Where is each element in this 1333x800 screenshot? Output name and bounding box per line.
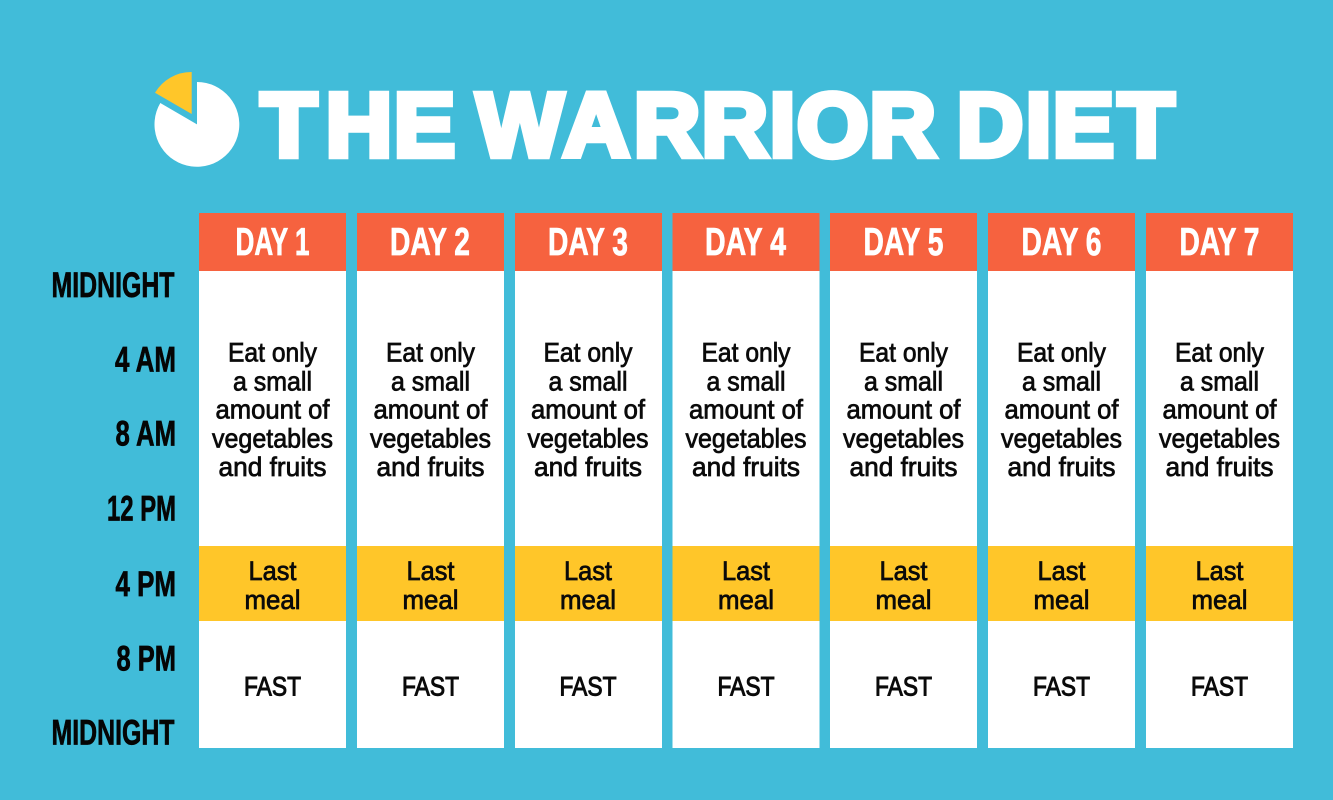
panel: day 1 column: and fruits <box>218 452 326 482</box>
panel: day 3 column <box>515 213 662 748</box>
panel: day 1 column: DAY 1 <box>236 221 310 264</box>
panel: day 1 column: Eat only <box>228 338 317 368</box>
icon: pie chart <box>155 72 239 167</box>
panel: day 7 column: amount of <box>1162 395 1277 425</box>
panel: day 1 column: vegetables <box>212 423 333 453</box>
panel: day 6 column <box>988 213 1135 748</box>
panel: day 2 column: FAST <box>402 672 459 702</box>
panel: day 1 column: a small <box>233 366 312 396</box>
panel: day 6 column: amount of <box>1004 395 1119 425</box>
time axis labels: 8 AM <box>116 415 176 454</box>
panel: day 6 column: Last <box>1038 556 1086 586</box>
panel: day 7 column: DAY 7 <box>1180 221 1260 264</box>
panel: day 4 column: amount of <box>689 395 803 425</box>
title: THE WARRIOR DIET <box>261 76 1174 176</box>
panel: day 4 column: Eat only <box>702 338 791 368</box>
panel: day 5 column <box>830 213 977 748</box>
panel: day 7 column: vegetables <box>1159 423 1280 453</box>
panel: day 5 column: a small <box>864 366 943 396</box>
panel: day 3 column: DAY 3 <box>548 221 628 264</box>
time axis labels <box>52 266 176 752</box>
panel: day 1 column: meal <box>244 585 300 615</box>
panel: day 6 column: and fruits <box>1008 452 1116 482</box>
panel: day 1 column <box>199 213 346 748</box>
panel: day 4 column <box>672 213 820 748</box>
panel: day 4 column: Last <box>722 556 770 586</box>
panel: day 6 column: FAST <box>1033 672 1090 702</box>
panel: day 3 column: Eat only <box>544 338 633 368</box>
panel: day 5 column: amount of <box>846 395 961 425</box>
panel: day 3 column: FAST <box>560 672 616 702</box>
panel: day 1 column: FAST <box>244 672 301 702</box>
panel: day 2 column: amount of <box>374 395 488 425</box>
panel: day 4 column: a small <box>706 366 786 396</box>
panel: day 7 column: meal <box>1192 585 1248 615</box>
panel: day 5 column: Last <box>880 556 928 586</box>
panel: day 7 column <box>1146 213 1293 748</box>
panel: day 2 column: Last <box>406 556 455 586</box>
panel: day 6 column: DAY 6 <box>1022 221 1102 264</box>
panel: day 5 column: Eat only <box>859 338 948 368</box>
panel: day 5 column: FAST <box>875 672 932 702</box>
panel: day 2 column: DAY 2 <box>390 221 470 264</box>
panel: day 4 column: FAST <box>718 672 774 702</box>
panel: day 4 column: and fruits <box>692 452 800 482</box>
panel: day 2 column: Eat only <box>386 338 475 368</box>
panel: day 6 column: a small <box>1022 366 1101 396</box>
panel: day 4 column: DAY 4 <box>705 221 786 264</box>
panel: day 2 column: vegetables <box>370 423 491 453</box>
panel: day 1 column: Last <box>248 556 297 586</box>
panel: day 6 column: Eat only <box>1017 338 1106 368</box>
panel: day 7 column: Eat only <box>1175 338 1264 368</box>
panel: day 5 column: vegetables <box>843 423 964 453</box>
time axis labels: 8 PM <box>116 640 176 679</box>
panel: day 5 column: meal <box>876 585 932 615</box>
panel: day 7 column: FAST <box>1191 672 1248 702</box>
time axis labels: 4 PM <box>116 565 176 604</box>
panel: day 3 column: vegetables <box>528 423 648 453</box>
panel: day 3 column: and fruits <box>534 452 642 482</box>
panel: day 5 column: and fruits <box>850 452 958 482</box>
panel: day 3 column: meal <box>560 585 616 615</box>
panel: day 3 column: a small <box>548 366 628 396</box>
panel: day 2 column: meal <box>402 585 458 615</box>
time axis labels: 12 PM <box>107 490 176 529</box>
panel: day 6 column: meal <box>1034 585 1090 615</box>
panel: day 1 column: amount of <box>216 395 330 425</box>
panel: day 7 column: and fruits <box>1166 452 1274 482</box>
panel: day 3 column: Last <box>564 556 612 586</box>
panel: day 2 column: and fruits <box>376 452 484 482</box>
panel: day 7 column: a small <box>1180 366 1259 396</box>
panel: day 4 column: vegetables <box>686 423 806 453</box>
time axis labels: 4 AM <box>115 341 176 380</box>
panel: day 2 column <box>357 213 504 748</box>
panel: day 5 column: DAY 5 <box>864 221 944 264</box>
panel: day 6 column: vegetables <box>1001 423 1122 453</box>
time axis labels: MIDNIGHT <box>52 713 174 752</box>
panel: day 2 column: a small <box>391 366 470 396</box>
panel: day 3 column: amount of <box>531 395 645 425</box>
time axis labels: MIDNIGHT <box>52 266 174 305</box>
panel: day 4 column: meal <box>718 585 774 615</box>
panel: day 7 column: Last <box>1196 556 1244 586</box>
